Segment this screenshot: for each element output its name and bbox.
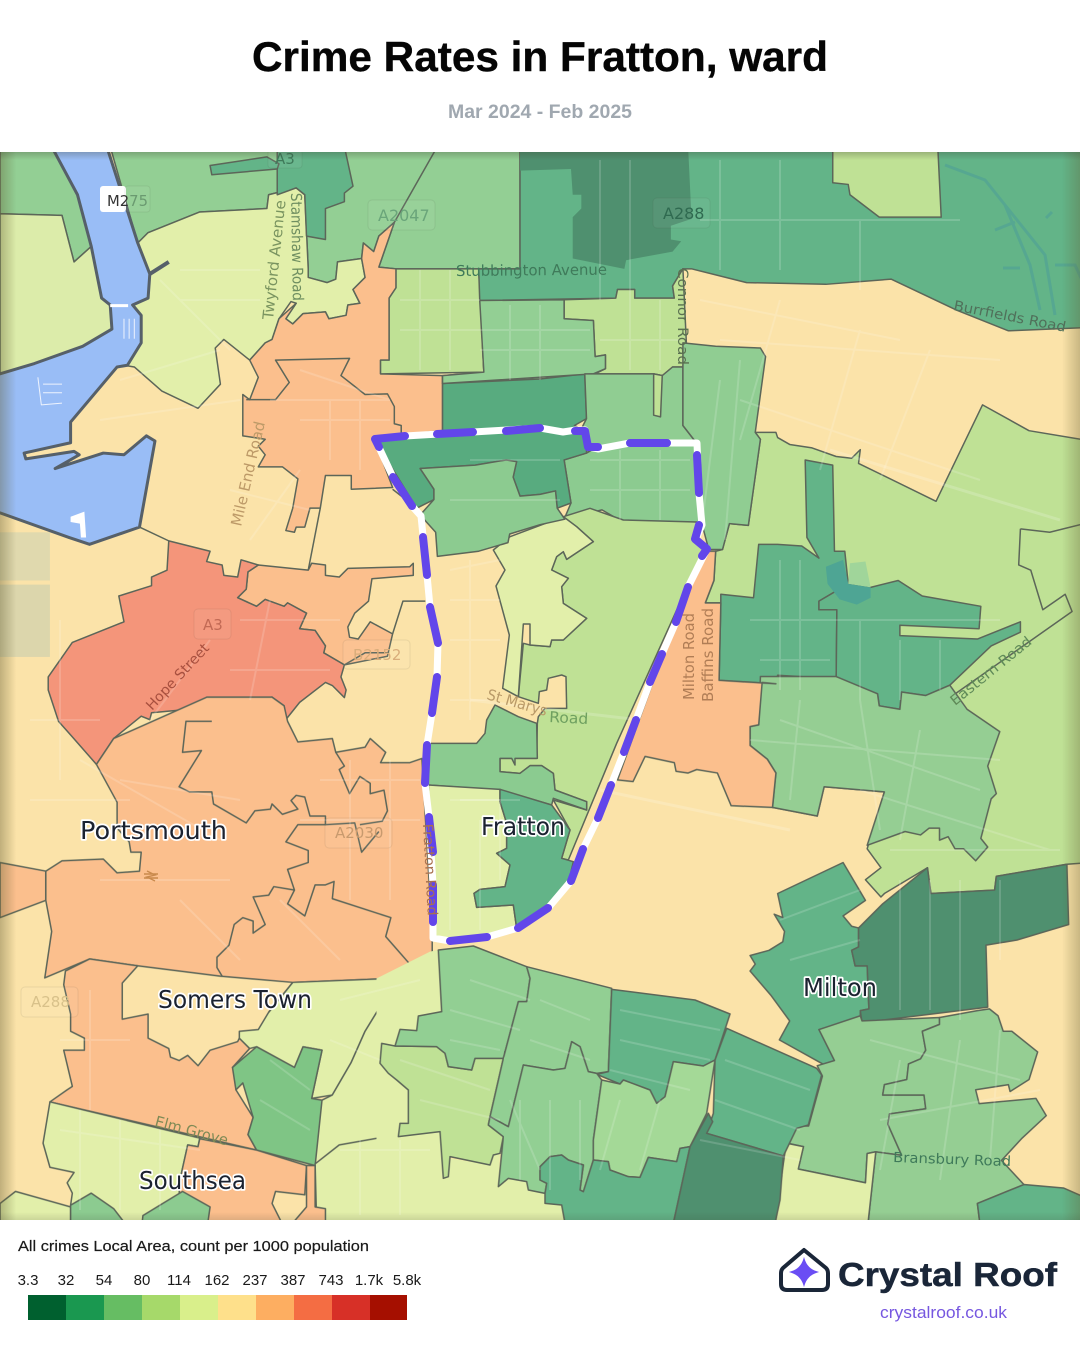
legend scale labels bbox=[18, 1272, 422, 1289]
title: Crime Rates in Fratton, ward bbox=[252, 33, 828, 80]
road name labels: Stamshaw Road bbox=[287, 193, 307, 301]
legend scale labels: 3.3 bbox=[18, 1272, 38, 1289]
icon: house with star bbox=[781, 1250, 828, 1290]
road number labels: A288 bbox=[31, 993, 70, 1011]
legend scale labels: 237 bbox=[242, 1272, 268, 1289]
road name labels: Elm Grove bbox=[153, 1112, 230, 1149]
road name labels: Road bbox=[549, 708, 589, 728]
place label: Portsmouth: Portsmouth bbox=[80, 816, 227, 845]
road name labels: Baffins Road bbox=[699, 608, 717, 702]
street network bbox=[30, 160, 1060, 1215]
place label: Somers Town: Somers Town bbox=[158, 985, 312, 1014]
legend colour bar bbox=[28, 1295, 407, 1320]
map edge vignette bbox=[0, 152, 1080, 1220]
road name labels: Bransbury Road bbox=[893, 1150, 1011, 1170]
place label: Southsea: Southsea bbox=[139, 1166, 246, 1195]
wordmark: Crystal Roof bbox=[838, 1256, 1058, 1293]
road name labels: Connor Road bbox=[674, 268, 690, 365]
road number labels: M275 bbox=[107, 192, 148, 210]
legend scale labels: 1.7k bbox=[355, 1272, 384, 1289]
subtitle: date range: Mar 2024 - Feb 2025 bbox=[448, 102, 632, 123]
icon: railway station bbox=[144, 871, 158, 881]
road name labels: Eastern Road bbox=[947, 634, 1035, 709]
bottom band neighbourhoods bbox=[377, 946, 822, 1223]
place label: Milton: Milton bbox=[803, 973, 877, 1002]
logo: Crystal Roof bbox=[781, 1250, 1058, 1322]
Fratton ward boundary bbox=[375, 428, 707, 941]
road number labels: A3 bbox=[275, 150, 295, 168]
legend scale labels: 114 bbox=[167, 1272, 191, 1289]
legend scale labels: 162 bbox=[204, 1272, 230, 1289]
road number labels: A3 bbox=[203, 616, 223, 634]
road number labels: B2152 bbox=[353, 646, 401, 664]
road name labels: Twyford Avenue bbox=[259, 199, 290, 321]
road number labels: A288 bbox=[663, 204, 704, 223]
road name labels: Hope Street bbox=[143, 640, 213, 714]
road number labels: A2030 bbox=[335, 824, 383, 842]
legend scale labels: 32 bbox=[58, 1272, 74, 1289]
Fratton ward interior bbox=[428, 508, 707, 942]
legend scale labels: 54 bbox=[96, 1272, 112, 1289]
legend title: All crimes Local Area, count per 1000 population bbox=[18, 1238, 369, 1255]
road name labels: Milton Road bbox=[680, 613, 698, 700]
legend scale labels: 387 bbox=[280, 1272, 306, 1289]
website url: crystalroof.co.uk bbox=[880, 1304, 1008, 1322]
road name labels bbox=[143, 193, 1067, 1170]
legend scale labels: 5.8k bbox=[393, 1272, 422, 1289]
legend scale labels: 80 bbox=[134, 1272, 150, 1289]
road shields bbox=[21, 150, 710, 1017]
road number labels bbox=[31, 150, 704, 1011]
place label: Fratton: Fratton bbox=[481, 812, 565, 841]
road name labels: Mile End Road bbox=[227, 420, 269, 528]
road name labels: St Marys bbox=[485, 686, 550, 720]
road name labels: Burrfields Road bbox=[952, 298, 1067, 336]
teal waterway lines bbox=[945, 165, 1080, 315]
legend bbox=[18, 1238, 422, 1320]
road number labels: A2047 bbox=[378, 206, 430, 225]
legend scale labels: 743 bbox=[318, 1272, 344, 1289]
road name labels: Stubbington Avenue bbox=[456, 261, 607, 280]
road name labels: Fratton Road bbox=[419, 823, 440, 916]
